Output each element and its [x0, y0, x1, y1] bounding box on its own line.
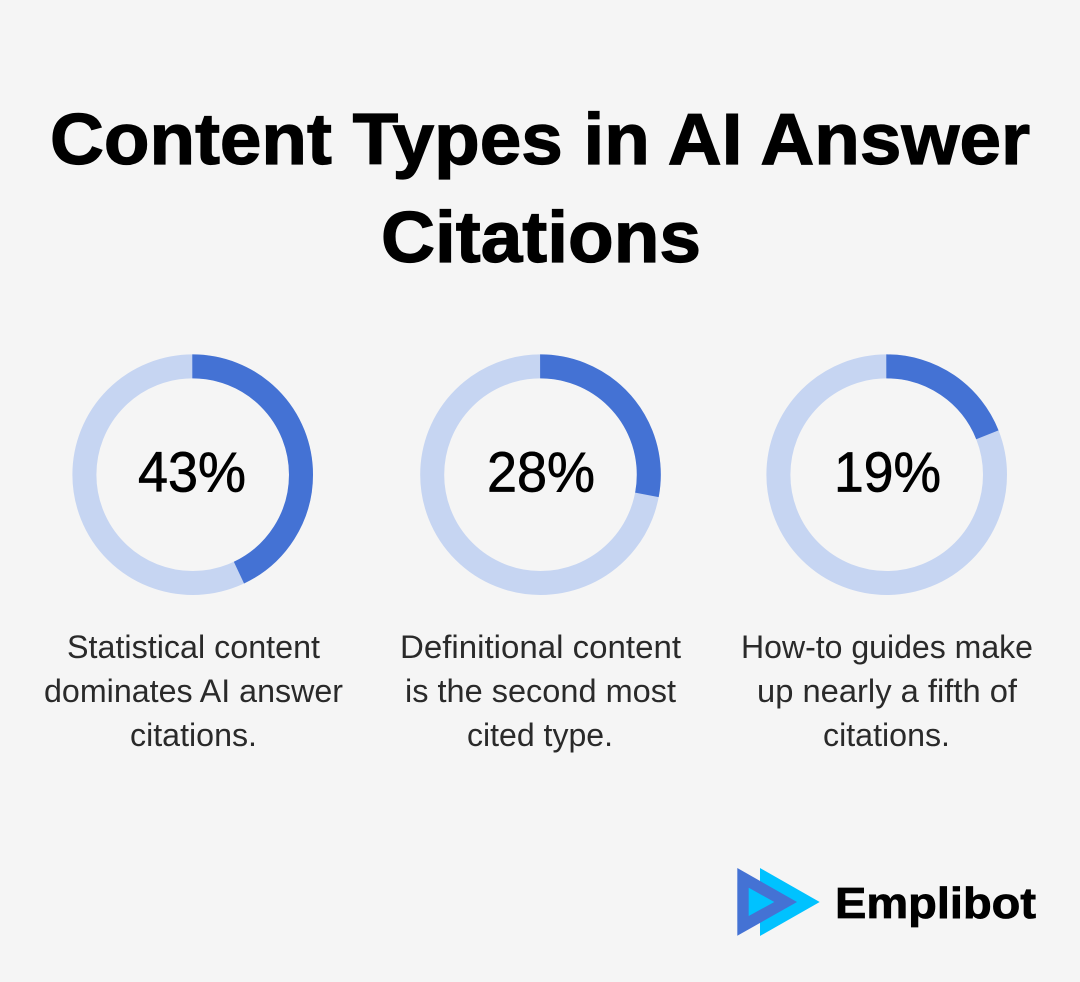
- description: how-to guides: citations.: [823, 717, 950, 753]
- description: statistical content: Statistical content: [67, 629, 320, 665]
- panel: definitional content 28%: [400, 366, 681, 753]
- description: how-to guides: up nearly a fifth of: [757, 673, 1017, 709]
- description: definitional content: is the second most: [405, 673, 676, 709]
- panel: statistical content 43%: [44, 366, 343, 753]
- wordmark: Emplibot: [835, 879, 1036, 928]
- description: definitional content: cited type.: [467, 717, 613, 753]
- title: Content Types in AI Answer: [50, 100, 1030, 180]
- donut chart: 28%: [432, 366, 649, 583]
- value: 43%: 43%: [138, 440, 246, 504]
- value: 19%: 19%: [834, 440, 941, 504]
- icon: play triangles: [737, 868, 820, 936]
- description: definitional content: Definitional content: [400, 629, 681, 665]
- description: how-to guides: How-to guides make: [741, 629, 1033, 665]
- description: statistical content: dominates AI answer: [44, 673, 343, 709]
- logo: Emplibot: [737, 868, 1036, 936]
- title: [50, 100, 1030, 278]
- donut chart: 43%: [84, 366, 301, 583]
- description: statistical content: [44, 629, 343, 753]
- description: how-to guides: [741, 629, 1033, 753]
- title: Citations: [381, 198, 701, 278]
- donut chart: 19%: [778, 366, 995, 583]
- value: 28%: 28%: [487, 440, 595, 504]
- description: definitional content: [400, 629, 681, 753]
- panel: how-to guides 19%: [741, 366, 1033, 753]
- description: statistical content: citations.: [130, 717, 257, 753]
